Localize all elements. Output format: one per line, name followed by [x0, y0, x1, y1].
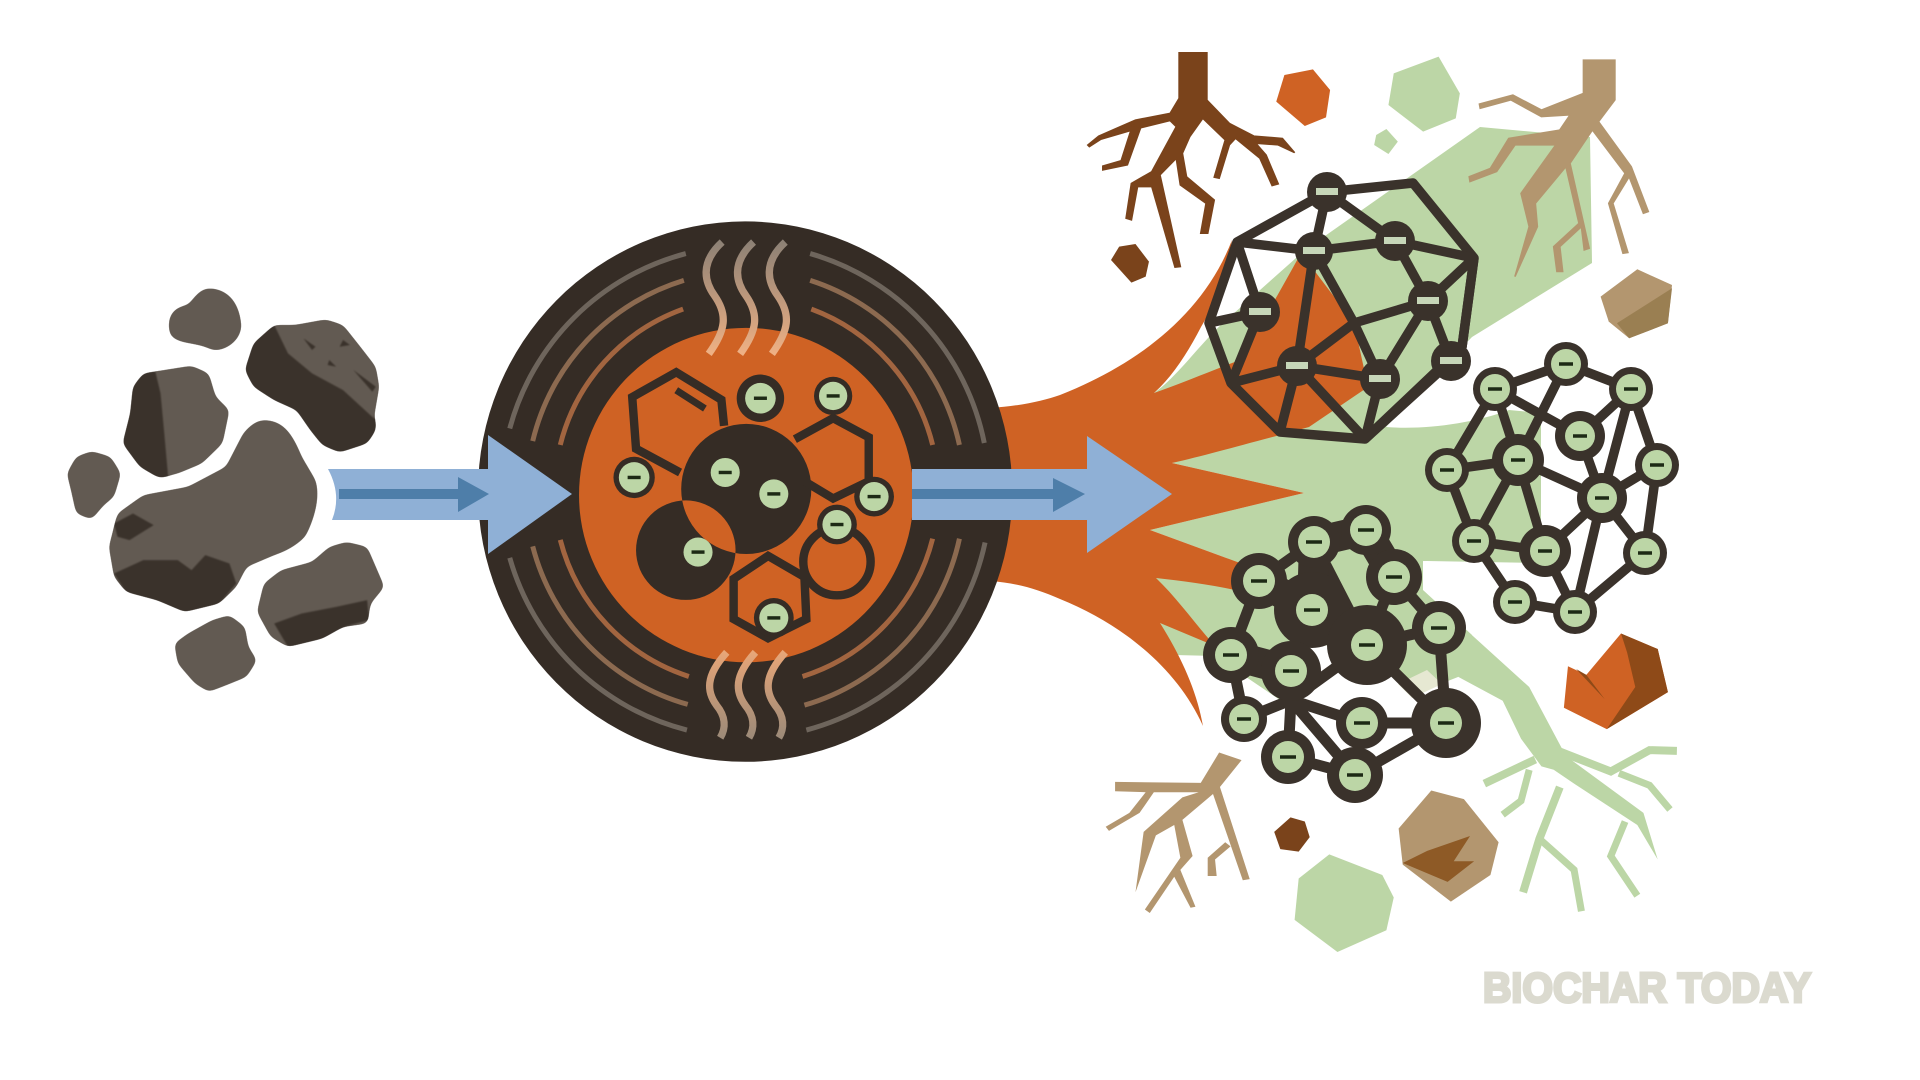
network 3 edges	[1231, 530, 1446, 775]
soil particles: upper group	[1111, 57, 1672, 338]
pale facet	[1398, 670, 1442, 698]
root: tan lower left	[1106, 753, 1250, 913]
rock: small left	[67, 451, 121, 519]
network 2 edges	[1447, 364, 1657, 612]
arrow: reactor to soil	[912, 436, 1172, 553]
orange core	[579, 328, 913, 662]
molecule network: lower, dense	[1203, 505, 1481, 803]
rock: bottom small	[174, 615, 257, 692]
root: tan upper right	[1469, 60, 1648, 277]
network 1 nodes	[1240, 172, 1471, 399]
rock: left	[123, 366, 229, 478]
rock: top small	[169, 288, 241, 350]
network 1 outline and edges	[1209, 183, 1474, 439]
particle: tan faceted rock	[1399, 790, 1499, 902]
soil particles: lower group	[1274, 634, 1668, 952]
green flow band behind the molecules	[1150, 127, 1592, 700]
heat waves: bottom	[710, 652, 785, 738]
biomass rocks	[67, 288, 384, 692]
concentric heat arcs	[510, 254, 985, 730]
watermark: Biochar Today: BIOCHAR TODAY	[1483, 964, 1811, 1011]
root: green lower right	[1423, 592, 1677, 911]
particle: large green polygon	[1295, 854, 1394, 952]
rock: top right	[245, 319, 379, 452]
heat waves: top	[706, 242, 786, 354]
particle: small brown hexagon	[1274, 817, 1310, 852]
particle: tan rock	[1601, 269, 1672, 338]
molecule network: upper, dark nodes	[1209, 172, 1474, 439]
particle: brown hexagon	[1111, 244, 1149, 283]
particle: orange hexagon	[1276, 69, 1330, 126]
orange flow flare	[990, 240, 1368, 726]
negative charges	[613, 375, 894, 638]
network 3 nodes	[1203, 505, 1481, 803]
arrow: biomass into reactor	[328, 435, 572, 554]
rock: lower right	[257, 542, 384, 647]
particle: large green hexagon	[1388, 57, 1460, 132]
molecule network: right, green charges	[1425, 342, 1679, 634]
network 2 nodes	[1425, 342, 1679, 634]
pyrolysis reactor circle	[478, 221, 1012, 762]
particle: orange rock	[1564, 634, 1668, 729]
particle: small green hexagon	[1374, 129, 1398, 154]
reactor body	[478, 221, 1012, 762]
carbon ring molecule	[632, 372, 871, 638]
rock: large centre	[109, 420, 317, 612]
network 3 merged dark masses	[1231, 530, 1394, 671]
root: dark brown	[1088, 53, 1295, 267]
